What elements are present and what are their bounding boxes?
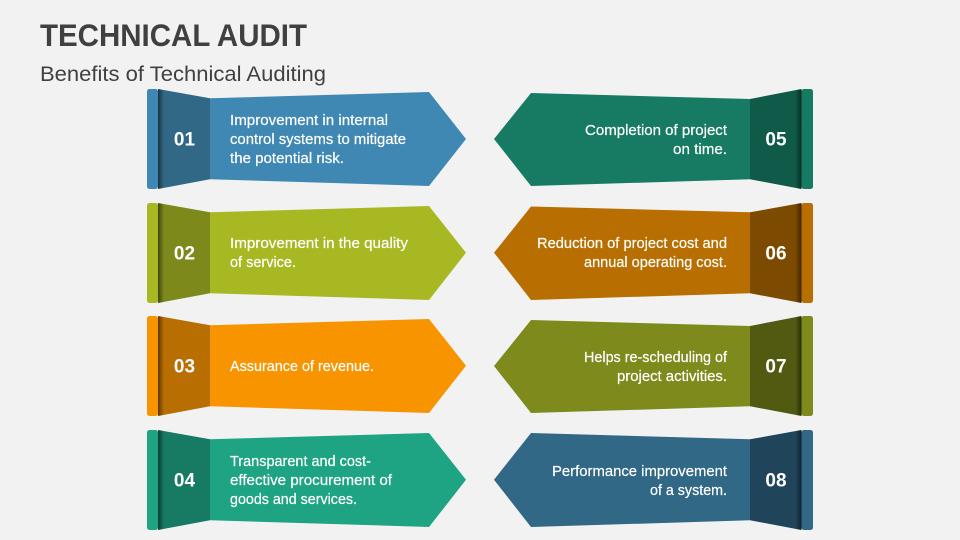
text 07: Helps re-scheduling of — [584, 350, 728, 366]
text 02: of service. — [230, 255, 296, 271]
panel: item 05 — [494, 89, 813, 189]
panel: item 07 — [494, 316, 813, 416]
panel: item 02 — [147, 203, 466, 303]
panel: item 06 — [494, 203, 813, 303]
number 06: 06 — [765, 244, 787, 264]
panel: item 04 — [147, 430, 466, 530]
number 03: 03 — [174, 356, 195, 378]
panel: item 01 — [147, 89, 466, 189]
number 01: 01 — [174, 130, 195, 150]
text 04: Transparent and cost- — [230, 454, 371, 470]
number 04: 04 — [174, 470, 195, 492]
panel: item 03 — [147, 316, 466, 416]
text 06: annual operating cost. — [584, 255, 727, 271]
text 02: Improvement in the quality — [230, 236, 409, 252]
subtitle: Benefits of Technical Auditing — [40, 62, 326, 86]
text 04: goods and services. — [230, 492, 357, 508]
panel: item 08 — [494, 430, 813, 530]
text 08: of a system. — [650, 483, 727, 499]
text 07: project activities. — [617, 369, 727, 385]
text 01: the potential risk. — [230, 151, 344, 167]
number 02: 02 — [174, 244, 195, 264]
text 06: Reduction of project cost and — [537, 236, 727, 252]
text 03: Assurance of revenue. — [230, 359, 374, 375]
text 05: Completion of project — [585, 123, 727, 139]
text 04: effective procurement of — [230, 473, 393, 489]
number 07: 07 — [765, 356, 787, 378]
text 01: Improvement in internal — [230, 113, 388, 129]
text 01: control systems to mitigate — [230, 132, 406, 148]
number 05: 05 — [765, 130, 787, 150]
number 08: 08 — [765, 470, 787, 492]
title: TECHNICAL AUDIT — [40, 17, 307, 53]
text 08: Performance improvement — [552, 464, 727, 480]
text 05: on time. — [673, 142, 727, 158]
